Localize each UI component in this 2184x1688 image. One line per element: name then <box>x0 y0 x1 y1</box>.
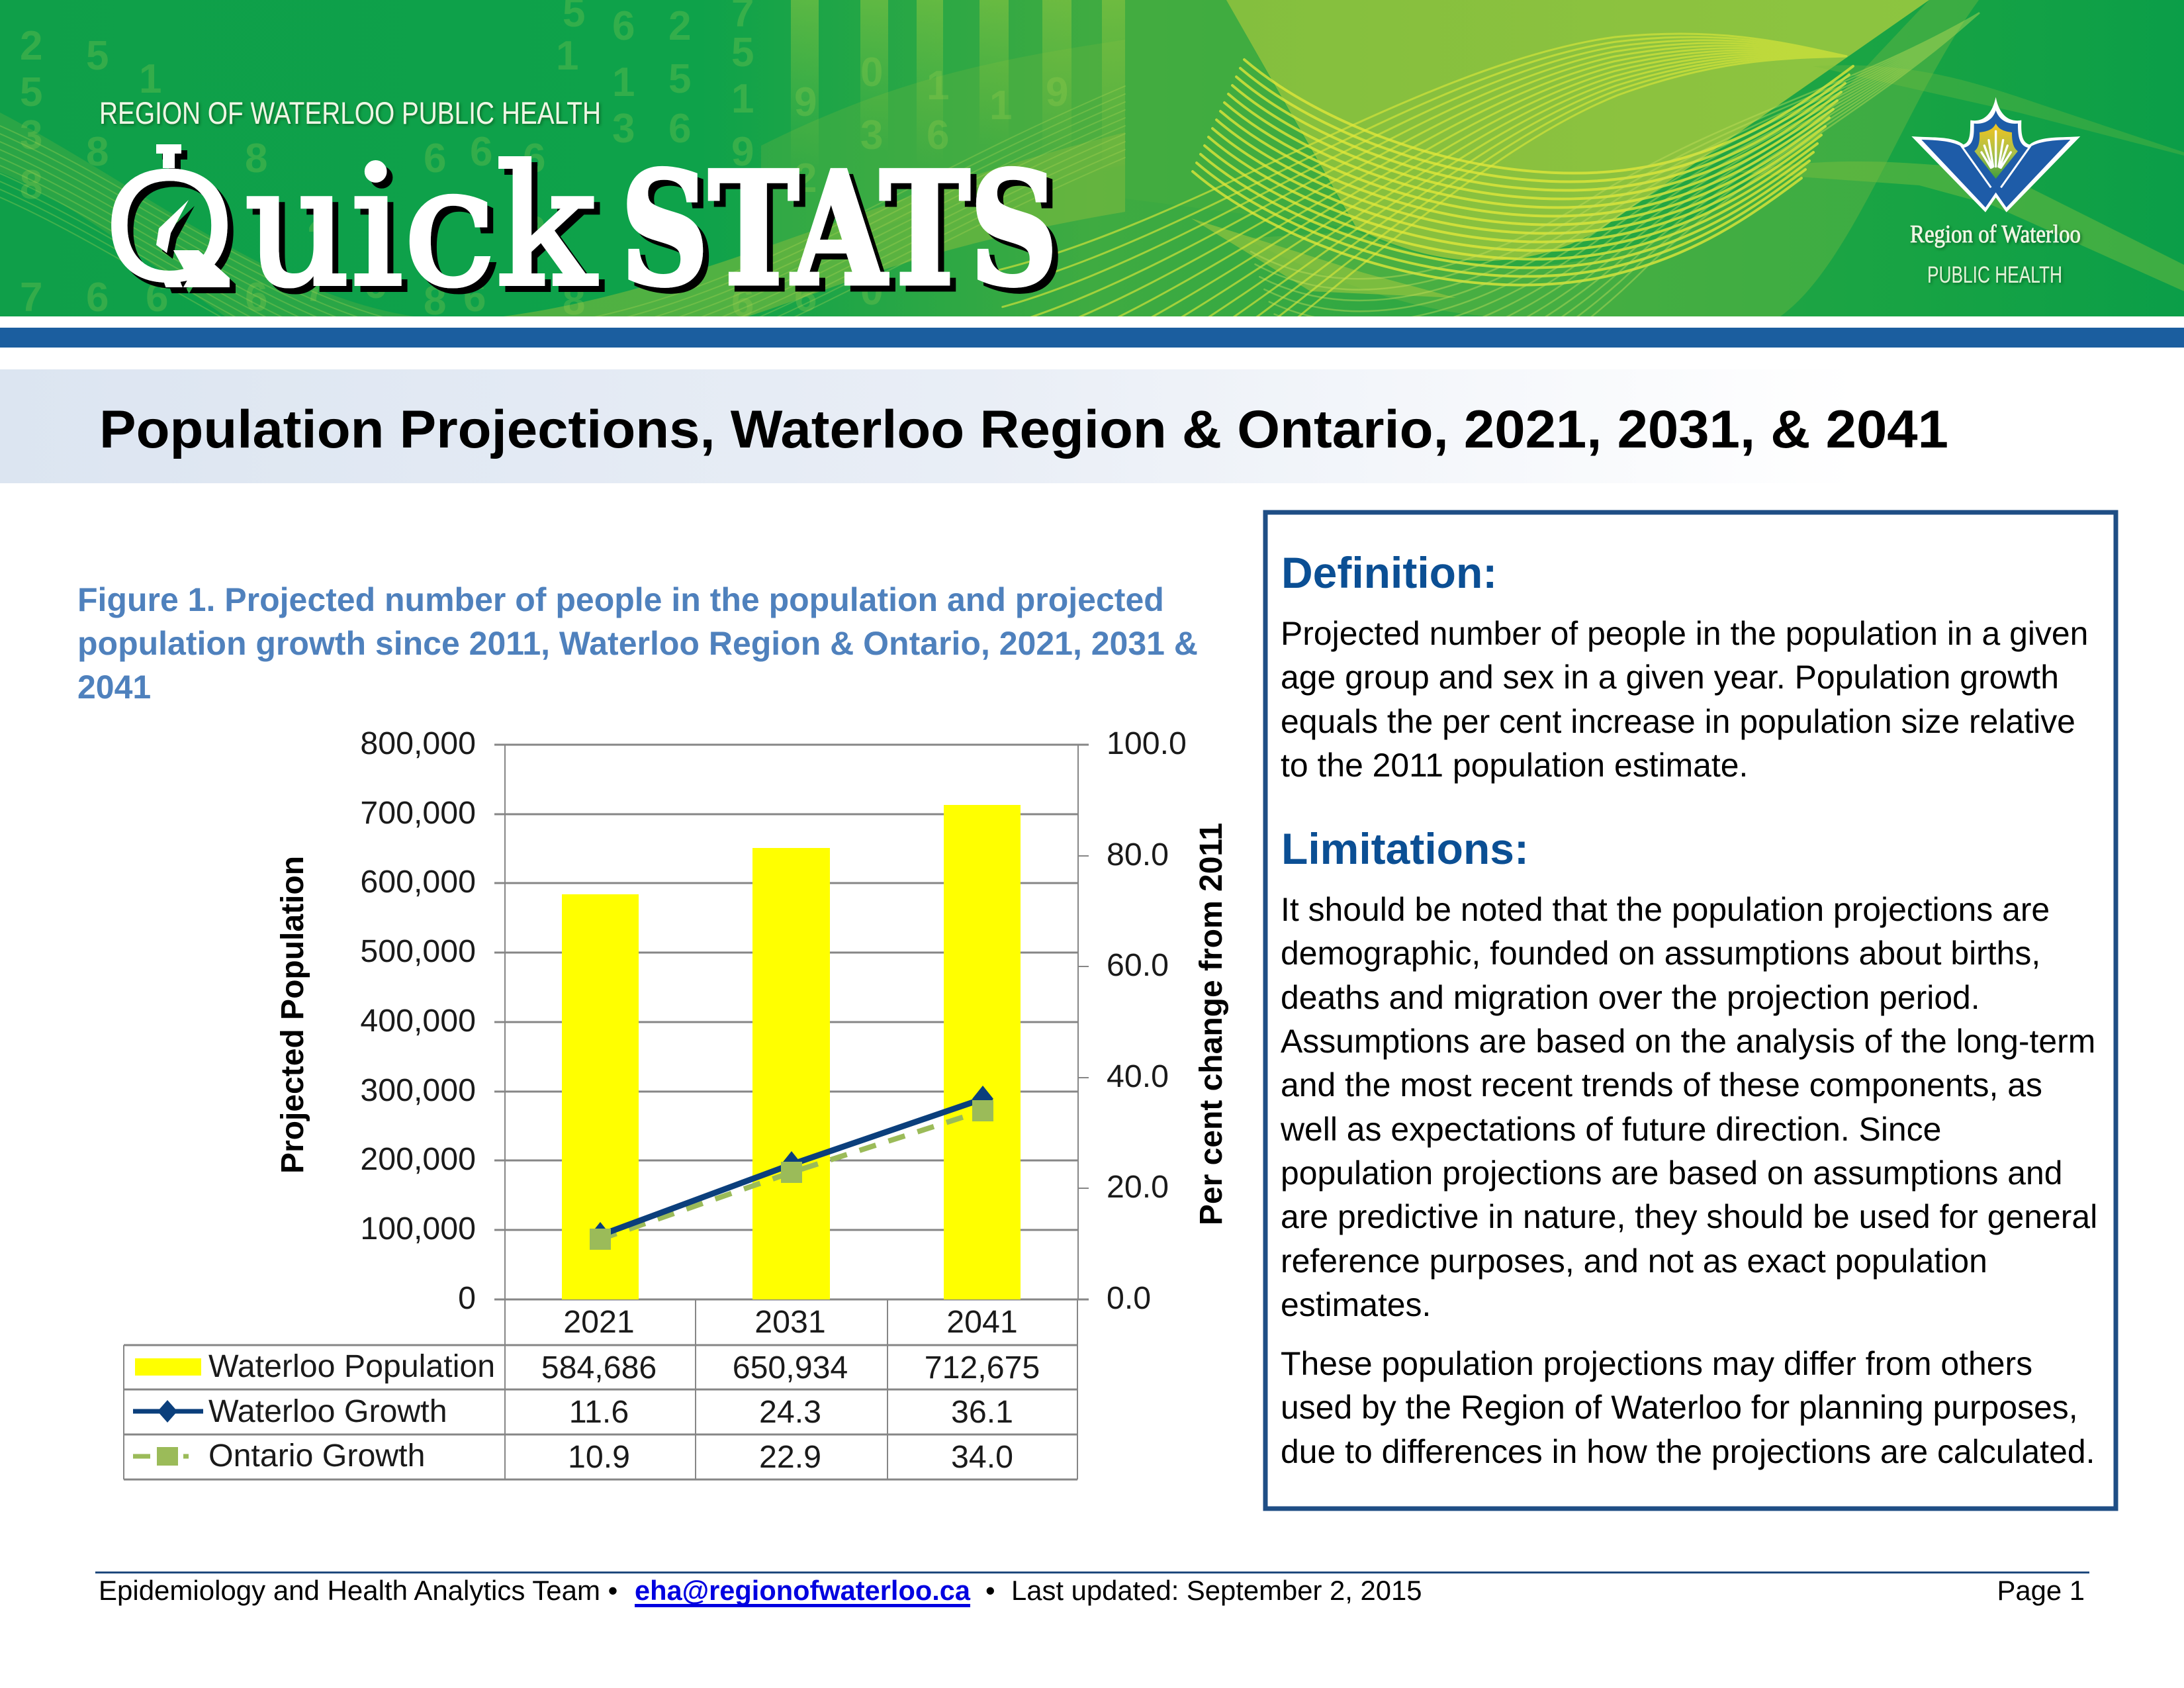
background digits: 1 <box>989 83 1012 128</box>
legend: Waterloo Growth row <box>133 1393 1013 1430</box>
footer <box>95 1571 2089 1607</box>
background digits: 6 <box>245 275 267 320</box>
logo text: Region of Waterloo: Region of Waterloo <box>1910 220 2081 248</box>
limitations text: and the most recent trends of these components, as <box>1281 1066 2042 1103</box>
limitations text: population projections are based on assumptions and <box>1281 1154 2063 1192</box>
background digits: 6 <box>463 275 486 320</box>
background digits: 6 <box>470 129 492 175</box>
footer page number: Page 1 <box>1997 1575 2085 1606</box>
figure heading: 2041 <box>77 669 151 706</box>
definition text: to the 2011 population estimate. <box>1281 747 1748 784</box>
limitations text: deaths and migration over the projection period. <box>1281 979 1980 1016</box>
background digits: 6 <box>731 280 754 326</box>
left axis labels: 600,000 <box>360 864 476 900</box>
chart: population bars and growth lines with data table <box>124 726 1229 1479</box>
definition text <box>1281 615 2088 784</box>
table header years: 2021 <box>563 1304 635 1340</box>
legend: Ontario Growth row <box>133 1438 1013 1475</box>
background digits <box>20 0 1068 326</box>
background digits: 2 <box>794 156 817 201</box>
figure heading <box>77 581 1198 706</box>
Quick wordmark with stopwatch Q: Q <box>103 135 236 316</box>
right axis labels: 80.0 <box>1107 837 1169 872</box>
footer last updated: Last updated: September 2, 2015 <box>1011 1575 1422 1606</box>
background digits: 3 <box>20 113 42 158</box>
background digits: 8 <box>86 129 109 175</box>
background digits: 6 <box>523 136 545 181</box>
figure heading: Figure 1. Projected number of people in the population and projected <box>77 581 1164 618</box>
background digits: 0 <box>860 50 883 95</box>
gridlines and plot frame <box>494 745 1089 1299</box>
limitations text: well as expectations of future direction. Since <box>1280 1111 1941 1148</box>
left axis labels: 800,000 <box>360 726 476 761</box>
background digits: 8 <box>20 162 42 208</box>
line: Waterloo Growth <box>590 1086 993 1248</box>
background digits: 6 <box>612 3 635 49</box>
left axis title: Projected Population <box>275 856 310 1174</box>
planning note text <box>1281 1345 2095 1470</box>
background digits: 2 <box>668 3 691 49</box>
legend: Waterloo Population row: 712,675 <box>925 1350 1040 1385</box>
lime wave background shape <box>0 0 2184 320</box>
title band <box>0 369 2184 483</box>
background digits: 7 <box>304 265 327 310</box>
background digits: 6 <box>927 113 949 158</box>
right axis title: Per cent change from 2011 <box>1194 823 1229 1225</box>
background digits: 9 <box>794 79 817 125</box>
panel: definition and limitations <box>1265 512 2116 1509</box>
background digits: 6 <box>146 275 168 320</box>
background digits: 5 <box>731 30 754 75</box>
limitations text: reference purposes, and not as exact population <box>1281 1243 1987 1280</box>
right axis labels: 0.0 <box>1107 1280 1151 1316</box>
legend: Ontario Growth row: 10.9 <box>568 1439 630 1475</box>
heading: Limitations: Limitations: <box>1281 824 1529 873</box>
limitations text <box>1280 891 2097 1323</box>
legend: Waterloo Growth row: 36.1 <box>951 1394 1013 1430</box>
legend: Waterloo Growth row: 24.3 <box>759 1394 821 1430</box>
planning note text: used by the Region of Waterloo for planning purposes, <box>1281 1389 2078 1426</box>
footer bullet: • <box>985 1575 995 1606</box>
icon: Region of Waterloo logo <box>1911 97 2080 212</box>
STATS wordmark: STATS <box>621 138 1058 320</box>
right axis labels <box>1107 726 1187 1316</box>
background digits: 6 <box>424 136 446 181</box>
background digits: 0 <box>860 268 883 314</box>
background digits: 2 <box>308 195 330 241</box>
background digits: 1 <box>927 63 949 109</box>
legend: Waterloo Population row: Waterloo Population <box>208 1348 495 1384</box>
background digits: 8 <box>424 278 446 324</box>
legend: Waterloo Population row: 584,686 <box>541 1350 657 1385</box>
limitations text: are predictive in nature, they should be used for general <box>1281 1198 2097 1235</box>
definition text: Projected number of people in the population in a given <box>1281 615 2088 652</box>
right axis labels: 100.0 <box>1107 726 1187 761</box>
background digits: 5 <box>20 70 42 115</box>
background digits: 1 <box>139 56 161 102</box>
background digits: 8 <box>563 278 585 324</box>
background digits: 3 <box>860 113 883 158</box>
planning note text: These population projections may differ from others <box>1281 1345 2032 1382</box>
legend: Waterloo Growth row: 11.6 <box>569 1394 629 1430</box>
background digits: 1 <box>556 33 578 79</box>
legend: Waterloo Growth row: Waterloo Growth <box>208 1393 447 1429</box>
left axis labels: 400,000 <box>360 1003 476 1039</box>
organisation name: REGION OF WATERLOO PUBLIC HEALTH <box>99 95 601 130</box>
right axis labels: 40.0 <box>1107 1058 1169 1094</box>
background digits: 1 <box>612 60 635 105</box>
background digits: 9 <box>1046 70 1068 115</box>
left axis labels: 200,000 <box>360 1141 476 1177</box>
line: Ontario Growth <box>600 1111 983 1239</box>
legend: Ontario Growth row: 34.0 <box>951 1439 1013 1475</box>
background digits: 1 <box>731 76 754 122</box>
Quick wordmark with stopwatch Q: uick <box>244 130 597 323</box>
left axis labels: 300,000 <box>360 1072 476 1108</box>
markers: Ontario Growth <box>590 1100 993 1250</box>
figure heading: population growth since 2011, Waterloo Region & Ontario, 2021, 2031 & <box>77 625 1198 662</box>
definition text: equals the per cent increase in population size relative <box>1281 703 2075 740</box>
logo text: Public Health: PUBLIC HEALTH <box>1927 262 2062 288</box>
background digits: 2 <box>523 209 545 254</box>
left axis labels: 500,000 <box>360 933 476 969</box>
left axis labels: 100,000 <box>360 1211 476 1246</box>
limitations text: demographic, founded on assumptions about births, <box>1281 935 2040 972</box>
background digits: 5 <box>86 33 109 79</box>
table header years: 2031 <box>754 1304 826 1340</box>
footer team credit: Epidemiology and Health Analytics Team • <box>99 1575 617 1606</box>
background digits: 6 <box>86 275 109 320</box>
limitations text: It should be noted that the population projections are <box>1281 891 2050 928</box>
background digits: 2 <box>20 23 42 69</box>
header banner <box>0 0 2184 316</box>
background digits: 8 <box>245 136 267 181</box>
background digits: 3 <box>612 106 635 152</box>
table header years <box>563 1304 1018 1340</box>
right axis labels: 60.0 <box>1107 947 1169 983</box>
table header years: 2041 <box>946 1304 1018 1340</box>
woven line waves <box>0 12 2079 316</box>
vertical number stripes <box>791 0 1125 146</box>
data table <box>124 1299 1077 1479</box>
right axis labels: 20.0 <box>1107 1169 1169 1205</box>
left axis labels <box>360 726 476 1316</box>
background digits: 6 <box>668 106 691 152</box>
blue rule <box>0 328 2184 348</box>
legend: Waterloo Population row <box>135 1348 1040 1385</box>
legend: Ontario Growth row: 22.9 <box>759 1439 821 1475</box>
background digits: 6 <box>364 261 387 307</box>
legend: Waterloo Population row: 650,934 <box>733 1350 848 1385</box>
Quick wordmark with stopwatch Q <box>111 144 605 294</box>
background digits: 6 <box>794 275 817 320</box>
left axis labels: 700,000 <box>360 795 476 831</box>
definition text: age group and sex in a given year. Population growth <box>1281 659 2059 696</box>
background digits: 9 <box>731 129 754 175</box>
legend: Ontario Growth row: Ontario Growth <box>208 1438 425 1474</box>
bars: Waterloo Population <box>562 805 1021 1299</box>
left axis labels: 0 <box>458 1280 476 1316</box>
footer email link: eha@regionofwaterloo.ca <box>635 1575 971 1606</box>
limitations text: estimates. <box>1281 1286 1431 1323</box>
background digits: 7 <box>20 275 42 320</box>
heading: Definition: Definition: <box>1281 548 1497 597</box>
background digits: 5 <box>668 56 691 102</box>
planning note text: due to differences in how the projections are calculated. <box>1281 1433 2095 1470</box>
limitations text: Assumptions are based on the analysis of the long-term <box>1281 1023 2095 1060</box>
title: Population Projections, Waterloo Region & Ontario, 2021, 2031, & 2041 <box>99 400 1948 459</box>
